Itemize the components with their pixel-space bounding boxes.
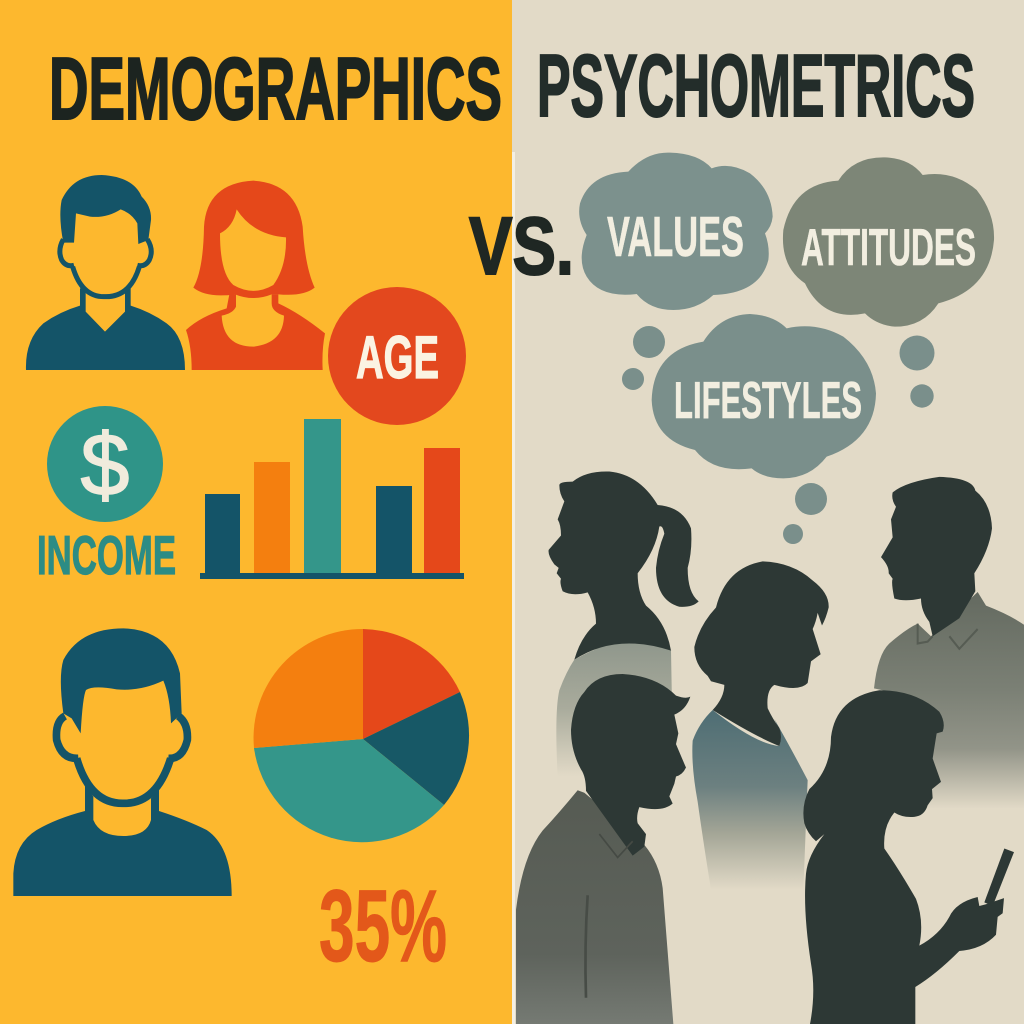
badge: age	[328, 287, 466, 425]
cloud label: lifestyles: LIFESTYLES	[674, 372, 862, 430]
panel: demographics background	[0, 0, 512, 1024]
cloud label: values: VALUES	[607, 205, 744, 269]
thought cloud: lifestyles	[652, 314, 876, 478]
panel: psychometrics background	[512, 0, 1024, 1024]
icon: income dollar coin: $	[81, 415, 129, 514]
icon: large man bust	[13, 628, 232, 896]
thought clouds group	[579, 153, 994, 478]
pie chart	[254, 629, 469, 842]
center divider	[512, 152, 515, 1024]
thought cloud: values	[579, 153, 773, 310]
silhouette: man back right	[874, 477, 1024, 811]
label: 35 percent: 35%	[319, 869, 447, 983]
silhouettes group	[516, 471, 1024, 1024]
bar chart	[200, 419, 464, 579]
label: income: INCOME	[37, 524, 176, 586]
versus label: VS.	[469, 201, 574, 292]
silhouette: woman with phone	[803, 690, 1014, 1024]
icon: woman bust	[186, 181, 325, 370]
thought cloud: attitudes	[783, 157, 994, 327]
title: demographics: DEMOGRAPHICS	[49, 39, 502, 138]
silhouette: woman ponytail back	[549, 471, 699, 777]
silhouette: woman center	[692, 561, 829, 890]
thought bubbles trail	[622, 326, 934, 544]
icon: man bust top	[26, 175, 185, 370]
icon: income dollar coin	[47, 406, 163, 522]
badge: age: AGE	[356, 324, 439, 391]
silhouette: man front left	[516, 674, 690, 1024]
